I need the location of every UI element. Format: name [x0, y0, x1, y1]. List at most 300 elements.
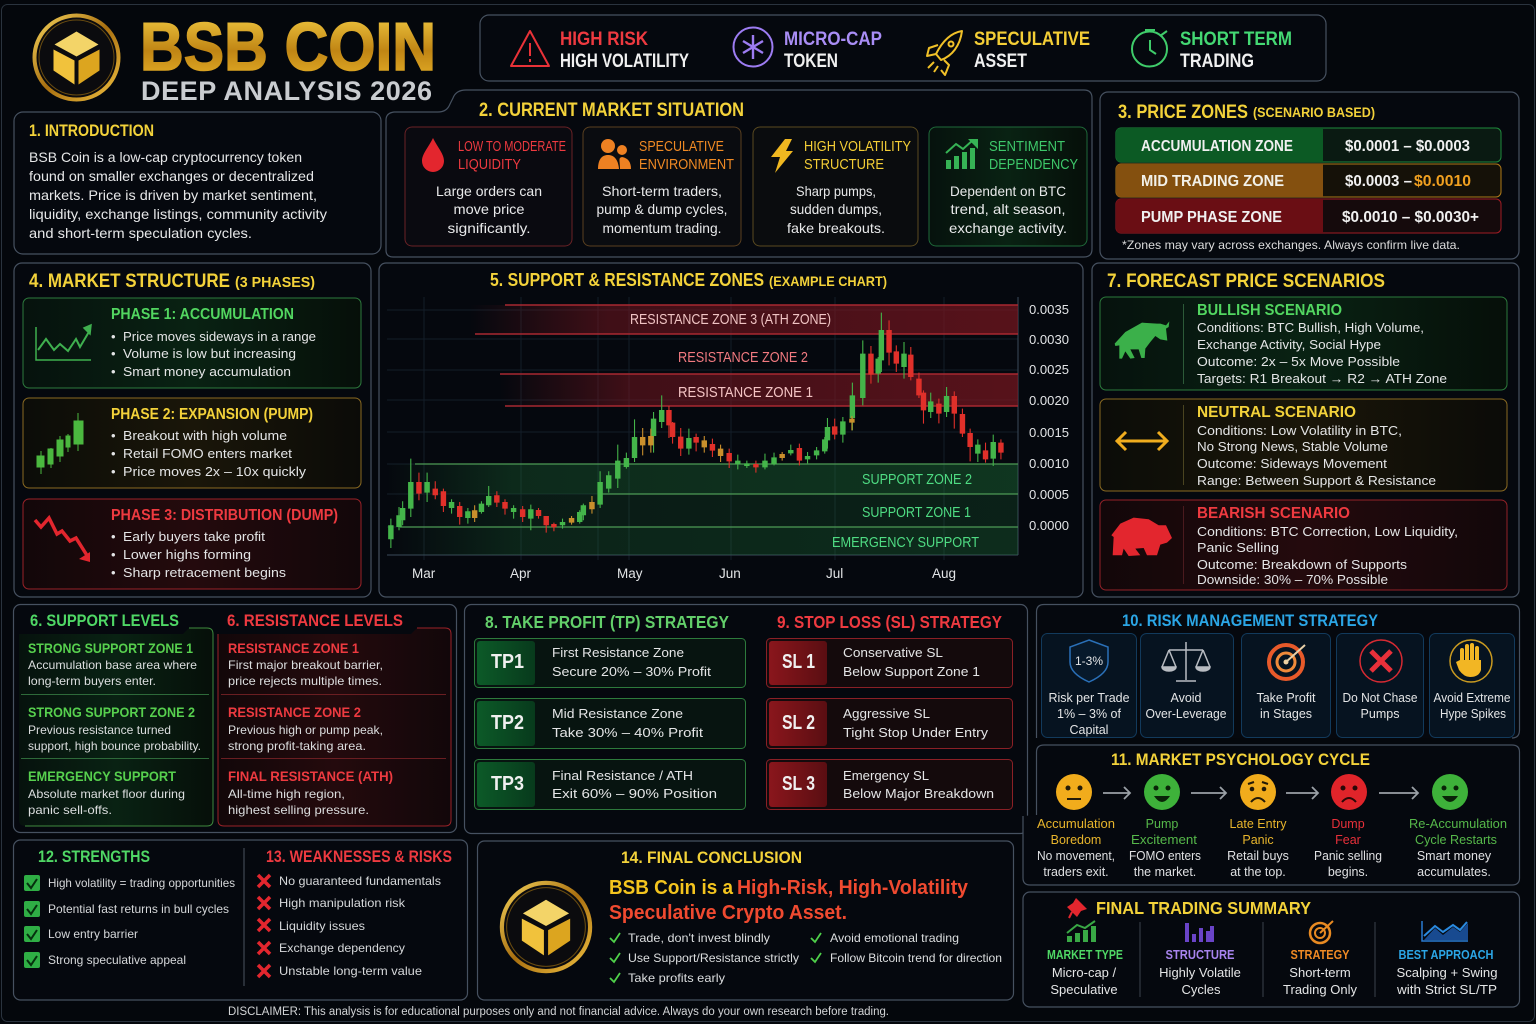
stage: re-accumulation: [1409, 817, 1507, 879]
card: neutral: Conditions: Low Volatility in BTC,: [1197, 423, 1402, 438]
card: SL1: [766, 638, 1012, 688]
column: best approach: BEST APPROACH: [1398, 947, 1494, 962]
stage: dump: Fear: [1335, 833, 1361, 847]
chart grid: [387, 297, 1018, 560]
badge: high risk: [560, 29, 689, 72]
card: avoid over-leverage: Avoid: [1170, 691, 1202, 705]
column: strategy: [1283, 921, 1357, 997]
heading: take profit: 8. TAKE PROFIT (TP) STRATEGY: [485, 612, 729, 632]
panel: 4 market structure: [14, 263, 371, 597]
list: strengths: Potential fast returns in bull cycles: [48, 902, 229, 916]
heading: resistance levels: 6. RESISTANCE LEVELS: [227, 611, 403, 630]
stage: late entry: at the top.: [1230, 865, 1286, 879]
text block: markets. Price is driven by market sentiment,: [29, 187, 317, 203]
stage: accumulation: No movement,: [1037, 849, 1115, 863]
panel: 8 and 9 take profit and stop loss: [464, 604, 1028, 834]
checklist: Use Support/Resistance strictly: [628, 951, 799, 965]
stage: dump: begins.: [1328, 865, 1368, 879]
card: structure: STRUCTURE: [804, 156, 884, 173]
card: phase 3: •: [111, 565, 116, 580]
card: phase 1: [23, 298, 361, 388]
note: *Zones may vary across exchanges. Always confirm live data.: [1122, 238, 1460, 252]
card: sentiment: trend, alt season,: [950, 201, 1066, 217]
row: accumulation zone: [1116, 128, 1501, 162]
card: resistance levels: [218, 628, 451, 826]
card: structure: Sharp pumps,: [796, 183, 876, 199]
card: SL3: [766, 760, 1012, 810]
card: phase 3: Early buyers take profit: [123, 529, 265, 544]
arrow: [1191, 787, 1226, 799]
list: strengths: Strong speculative appeal: [48, 953, 186, 967]
panel: 12 and 13 strengths and weaknesses: [14, 840, 468, 1000]
card: resistance levels: RESISTANCE ZONE 1: [228, 640, 359, 656]
card: bearish: Outcome: Breakdown of Supports: [1197, 557, 1408, 572]
card: SL3: SL 3: [782, 773, 815, 795]
heading: 5. SUPPORT & RESISTANCE ZONES: [490, 270, 764, 290]
card: TP1: First Resistance Zone: [552, 645, 684, 660]
x axis labels: Mar: [412, 566, 436, 581]
stage: re-accumulation: Re-Accumulation: [1409, 817, 1507, 831]
icon: worried face: [1240, 774, 1276, 810]
zone labels: [630, 311, 979, 551]
headline: BSB Coin is a: [609, 877, 734, 899]
checklist: [610, 931, 1002, 985]
panel: 5 support and resistance chart: [379, 263, 1083, 597]
heading: (3 PHASES): [235, 274, 315, 291]
card: avoid hype spikes: [1430, 634, 1514, 738]
card: support levels: EMERGENCY SUPPORT: [28, 768, 176, 784]
card: resistance levels: strong profit-taking area.: [228, 739, 366, 753]
arrow: [1286, 787, 1318, 799]
row: accumulation zone: ACCUMULATION ZONE: [1141, 138, 1293, 155]
heading: (EXAMPLE CHART): [769, 273, 887, 289]
card: phase 1: •: [111, 364, 116, 379]
x axis labels: Aug: [932, 566, 956, 581]
list: weaknesses: [258, 874, 441, 978]
card: avoid over-leverage: Over-Leverage: [1146, 707, 1227, 721]
column: market type: MARKET TYPE: [1047, 947, 1123, 962]
column: best approach: with Strict SL/TP: [1396, 982, 1497, 997]
card: phase 2: Price moves 2x – 10x quickly: [123, 464, 307, 479]
stage: dump: [1314, 817, 1382, 879]
icon: warning triangle: [511, 31, 549, 66]
heading: 10. RISK MANAGEMENT STRATEGY: [1122, 611, 1379, 630]
icon: bear: [1111, 518, 1172, 556]
x axis labels: Jun: [719, 566, 741, 581]
panel: 6 support and resistance levels: [14, 604, 456, 832]
card: phase 1: PHASE 1: ACCUMULATION: [111, 306, 294, 323]
disclaimer: DISCLAIMER: This analysis is for educational purposes only and not financial advice. Always do your own research before trading.: [228, 1006, 889, 1018]
stage: late entry: Late Entry: [1230, 817, 1287, 831]
icon: rocket: [927, 31, 962, 75]
row: pump phase zone: $0.0010 – $0.0030+: [1342, 209, 1479, 226]
checklist: Take profits early: [628, 971, 725, 985]
icon: drop: [422, 138, 444, 172]
card: phase 3: Sharp retracement begins: [123, 565, 287, 580]
icon: stop hand: [1450, 640, 1492, 682]
icon: pin: [1067, 898, 1087, 918]
panel: 14 final conclusion: [478, 841, 1014, 1000]
stage: accumulation: Accumulation: [1037, 817, 1115, 831]
card: phase 3: PHASE 3: DISTRIBUTION (DUMP): [111, 507, 338, 524]
card: risk per trade: Risk per Trade: [1048, 691, 1130, 705]
heading: 14. FINAL CONCLUSION: [621, 848, 802, 867]
stage: re-accumulation: accumulates.: [1417, 865, 1491, 879]
card: sentiment: DEPENDENCY: [989, 156, 1078, 173]
card: risk per trade: [1042, 634, 1136, 738]
card: resistance levels: First major breakout barrier,: [228, 658, 383, 672]
card: phase 2: PHASE 2: EXPANSION (PUMP): [111, 406, 313, 423]
title: BSB COIN: [140, 9, 436, 85]
card: environment: pump & dump cycles,: [596, 201, 728, 217]
heading: FINAL TRADING SUMMARY: [1096, 898, 1311, 918]
card: phase 2: •: [111, 464, 116, 479]
heading: 3. PRICE ZONES: [1118, 102, 1248, 123]
list: strengths: Low entry barrier: [48, 927, 138, 941]
candlesticks: [388, 313, 1004, 548]
card: bullish: Exchange Activity, Social Hype: [1197, 337, 1381, 352]
badge: micro-cap: TOKEN: [784, 51, 838, 72]
arrow: [1379, 787, 1418, 799]
icon: sad face: [1331, 774, 1367, 810]
card: phase 2: •: [111, 446, 116, 461]
card: support levels: panic sell-offs.: [28, 803, 112, 817]
card: neutral: [1100, 399, 1507, 491]
panel: 1 introduction: [14, 112, 381, 254]
panel: 11 market psychology cycle: [1023, 745, 1520, 885]
card: phase 1: •: [111, 329, 116, 344]
badge: speculative: [974, 29, 1090, 72]
panel: final trading summary: [1023, 892, 1520, 1007]
column: market type: Speculative: [1050, 982, 1118, 997]
badge: speculative: ASSET: [974, 51, 1027, 72]
card: bullish: [1100, 297, 1507, 390]
text block: liquidity, exchange listings, community activity: [29, 206, 327, 222]
card: bullish: Conditions: BTC Bullish, High Volume,: [1197, 320, 1424, 335]
card: SL1: SL 1: [782, 651, 815, 673]
card: support levels: long-term buyers enter.: [28, 674, 156, 688]
card: SL3: Below Major Breakdown: [843, 786, 994, 801]
card: neutral: No Strong News, Stable Volume: [1197, 439, 1388, 454]
card: phase 3: •: [111, 529, 116, 544]
list: weaknesses: High manipulation risk: [279, 896, 406, 910]
icon: blue chart: [1422, 921, 1468, 941]
x axis labels: May: [617, 566, 643, 581]
row: mid trading zone: [1116, 164, 1501, 197]
zone labels: SUPPORT ZONE 1: [862, 504, 971, 521]
card: avoid over-leverage: [1140, 634, 1234, 738]
card: environment: momentum trading.: [602, 220, 722, 236]
heading: 7. FORECAST PRICE SCENARIOS: [1107, 271, 1385, 292]
card: neutral: Range: Between Support & Resistance: [1197, 473, 1436, 488]
card: do not chase pumps: Pumps: [1361, 707, 1399, 721]
card: phase 1: Volume is low but increasing: [123, 346, 296, 361]
card: TP3: [474, 760, 746, 810]
y axis labels: 0.0005: [1029, 487, 1069, 502]
stage: late entry: Retail buys: [1227, 849, 1289, 863]
card: bearish: Downside: 30% – 70% Possible: [1197, 572, 1388, 587]
card: TP2: [474, 698, 746, 748]
headline: High-Risk, High-Volatility: [737, 877, 969, 899]
card: do not chase pumps: [1336, 634, 1424, 738]
card: phase 1: Price moves sideways in a range: [123, 329, 316, 344]
card: risk per trade: Capital: [1070, 723, 1108, 737]
list: weaknesses: No guaranteed fundamentals: [279, 874, 441, 888]
y axis labels: 0.0025: [1029, 362, 1069, 377]
panel: 7 forecast price scenarios: [1092, 263, 1519, 597]
column: strategy: Short-term: [1289, 965, 1351, 980]
card: TP3: Exit 60% – 90% Position: [552, 786, 717, 801]
card: bullish: Targets: R1 Breakout → R2 → ATH Zone: [1197, 371, 1447, 386]
card: sentiment: exchange activity.: [949, 220, 1067, 236]
card: structure: HIGH VOLATILITY: [804, 138, 911, 155]
subtitle: DEEP ANALYSIS 2026: [141, 76, 432, 106]
arrow: [1103, 787, 1130, 799]
heading: support levels: 6. SUPPORT LEVELS: [30, 611, 179, 630]
stage: pump: the market.: [1134, 865, 1196, 879]
card: sentiment: SENTIMENT: [989, 138, 1065, 155]
x axis labels: [412, 566, 956, 581]
column: strategy: STRATEGY: [1290, 947, 1350, 962]
card: TP2: TP2: [491, 712, 524, 734]
y axis labels: 0.0035: [1029, 302, 1069, 317]
card: sentiment: [929, 127, 1087, 246]
list: strengths: High volatility = trading opportunities: [48, 876, 235, 890]
badge: high risk: HIGH RISK: [560, 29, 648, 50]
card: bullish: Outcome: 2x – 5x Move Possible: [1197, 354, 1400, 369]
badge: speculative: SPECULATIVE: [974, 29, 1090, 50]
zone labels: EMERGENCY SUPPORT: [832, 534, 979, 551]
icon: happy face: [1432, 774, 1468, 810]
card: TP1: TP1: [491, 651, 524, 673]
stage: pump: FOMO enters: [1129, 849, 1201, 863]
stage: late entry: [1227, 817, 1289, 879]
card: structure: sudden dumps,: [790, 201, 882, 217]
icon: bull: [1115, 321, 1169, 359]
y axis labels: [1029, 302, 1069, 533]
card: resistance levels: highest selling pressure.: [228, 803, 369, 817]
heading: weaknesses and risks: 13. WEAKNESSES & RISKS: [266, 848, 452, 866]
text block: [29, 149, 327, 241]
icon: clock: [1132, 30, 1167, 66]
heading: stop loss: 9. STOP LOSS (SL) STRATEGY: [777, 612, 1002, 632]
column: market type: Micro-cap /: [1052, 965, 1117, 980]
column: strategy: Trading Only: [1283, 982, 1357, 997]
card: resistance levels: FINAL RESISTANCE (ATH): [228, 768, 393, 784]
card: phase 3: Lower highs forming: [123, 547, 251, 562]
heading: strengths: 12. STRENGTHS: [38, 848, 150, 866]
stage: dump: Dump: [1331, 817, 1365, 831]
badge: micro-cap: [784, 29, 882, 72]
stage: re-accumulation: Cycle Restarts: [1415, 833, 1497, 847]
card: take profit in stages: Take Profit: [1256, 691, 1316, 705]
headline: [609, 877, 969, 924]
card: TP3: Final Resistance / ATH: [552, 768, 693, 783]
column: structure: Highly Volatile: [1159, 965, 1241, 980]
card: phase 2: Breakout with high volume: [123, 428, 287, 443]
list: weaknesses: Liquidity issues: [279, 919, 365, 933]
icon: growth bars: [1067, 921, 1096, 942]
card: phase 1: Smart money accumulation: [123, 364, 291, 379]
card: structure: [753, 127, 918, 246]
column: best approach: [1396, 921, 1498, 997]
zone labels: RESISTANCE ZONE 1: [678, 384, 813, 401]
row: mid trading zone: $0.0003 –: [1345, 173, 1412, 190]
x axis labels: Apr: [510, 566, 532, 581]
card: support levels: Absolute market floor during: [28, 787, 185, 801]
checklist: Avoid emotional trading: [830, 931, 959, 945]
logo: BSB coin: [34, 16, 118, 100]
icon: falling chart: [35, 518, 90, 562]
icon: growth bars: [946, 139, 978, 169]
stage: pump: [1129, 817, 1201, 879]
card: bullish: BULLISH SCENARIO: [1197, 302, 1342, 319]
column: best approach: Scalping + Swing: [1396, 965, 1498, 980]
card: SL1: Conservative SL: [843, 645, 943, 660]
heading: [1118, 102, 1375, 123]
stage: accumulation: traders exit.: [1043, 865, 1109, 879]
icon: happy face: [1144, 774, 1180, 810]
heading: (SCENARIO BASED): [1253, 104, 1375, 120]
card: support levels: STRONG SUPPORT ZONE 2: [28, 704, 195, 720]
column: structure: [1159, 923, 1241, 997]
card: bearish: Panic Selling: [1197, 540, 1279, 555]
card: phase 1: •: [111, 346, 116, 361]
row: accumulation zone: $0.0001 – $0.0003: [1345, 138, 1470, 155]
card: support levels: Accumulation base area where: [28, 658, 197, 672]
row: mid trading zone: MID TRADING ZONE: [1141, 173, 1284, 190]
y axis labels: 0.0020: [1029, 393, 1069, 408]
badge: short term: SHORT TERM: [1180, 29, 1292, 50]
stage: re-accumulation: Smart money: [1417, 849, 1492, 863]
card: phase 3: [23, 499, 361, 589]
icon: micro-cap: [734, 28, 772, 66]
icon: bolt: [771, 139, 793, 173]
text block: found on smaller exchanges or decentralized: [29, 168, 314, 184]
panel: top badges: [480, 15, 1326, 81]
support zones: [387, 464, 1018, 555]
card: resistance levels: RESISTANCE ZONE 2: [228, 704, 361, 720]
card: TP3: TP3: [491, 773, 524, 795]
icon: people: [598, 139, 631, 169]
card: bearish: [1100, 500, 1507, 590]
card: take profit in stages: in Stages: [1260, 707, 1312, 721]
y axis labels: 0.0000: [1029, 518, 1069, 533]
card: resistance levels: price rejects multiple times.: [228, 674, 382, 688]
panel: 3 price zones: [1100, 92, 1519, 259]
icon: coin: [502, 883, 590, 971]
card: SL2: Aggressive SL: [843, 706, 930, 721]
resistance zones: [470, 305, 1018, 406]
panel: 2 current market situation: [386, 90, 1092, 257]
card: resistance levels: Previous high or pump peak,: [228, 723, 383, 737]
icon: scales: [1162, 642, 1210, 681]
card: environment: SPECULATIVE: [639, 138, 724, 155]
card: liquidity: [405, 127, 572, 246]
card: support levels: support, high bounce probability.: [28, 739, 201, 753]
column: structure: STRUCTURE: [1166, 947, 1235, 962]
list: weaknesses: Exchange dependency: [279, 941, 405, 955]
checklist: Follow Bitcoin trend for direction: [830, 951, 1002, 965]
card: phase 2: [23, 398, 361, 488]
card: bearish: Conditions: BTC Correction, Low Liquidity,: [1197, 524, 1458, 539]
zone labels: RESISTANCE ZONE 2: [678, 349, 808, 366]
heading: 11. MARKET PSYCHOLOGY CYCLE: [1111, 750, 1370, 769]
card: environment: [583, 127, 741, 246]
stage: pump: Excitement: [1131, 833, 1198, 847]
y axis labels: 0.0030: [1029, 332, 1069, 347]
card: sentiment: Dependent on BTC: [950, 183, 1066, 199]
card: SL2: [766, 698, 1012, 748]
card: liquidity: significantly.: [448, 220, 530, 236]
card: SL1: Below Support Zone 1: [843, 664, 980, 679]
x axis labels: Jul: [826, 566, 843, 581]
panel: 10 risk management: [1036, 604, 1520, 738]
card: avoid hype spikes: Hype Spikes: [1440, 707, 1506, 721]
card: TP1: [474, 638, 746, 688]
icon: rising candles: [37, 413, 83, 474]
card: SL3: Emergency SL: [843, 768, 929, 783]
card: support levels: Previous resistance turned: [28, 723, 171, 737]
icon: shield: 1-3%: [1075, 654, 1103, 668]
heading: 2. CURRENT MARKET SITUATION: [479, 100, 744, 121]
stage: accumulation: Boredom: [1051, 833, 1101, 847]
card: resistance levels: All-time high region,: [228, 787, 345, 801]
card: neutral: NEUTRAL SCENARIO: [1197, 404, 1356, 421]
card: TP2: Mid Resistance Zone: [552, 706, 683, 721]
list: weaknesses: Unstable long-term value: [279, 964, 422, 978]
badge: short term: TRADING: [1180, 51, 1254, 72]
card: phase 3: •: [111, 547, 116, 562]
card: SL2: Tight Stop Under Entry: [843, 725, 989, 740]
icon: sideways arrow: [1117, 432, 1167, 450]
checklist: Trade, don't invest blindly: [628, 931, 770, 945]
column: structure: Cycles: [1181, 982, 1221, 997]
column: market type: [1047, 921, 1123, 997]
card: risk per trade: 1% – 3% of: [1057, 707, 1122, 721]
badge: short term: [1180, 29, 1292, 72]
card: phase 2: Retail FOMO enters market: [123, 446, 292, 461]
stage: late entry: Panic: [1242, 833, 1274, 847]
card: phase 2: •: [111, 428, 116, 443]
list: strengths: [24, 875, 235, 968]
card: take profit in stages: [1242, 634, 1330, 738]
badge: high risk: HIGH VOLATILITY: [560, 51, 689, 72]
stage: pump: Pump: [1146, 817, 1178, 831]
zone labels: SUPPORT ZONE 2: [862, 471, 972, 488]
y axis labels: 0.0015: [1029, 425, 1069, 440]
card: environment: ENVIRONMENT: [639, 156, 734, 173]
card: do not chase pumps: Do Not Chase: [1342, 691, 1418, 705]
stage: accumulation: [1037, 817, 1115, 879]
text block: BSB Coin is a low-cap cryptocurrency token: [29, 149, 302, 165]
icon: target: [1310, 921, 1333, 943]
heading: 4. MARKET STRUCTURE: [29, 271, 230, 292]
card: structure: fake breakouts.: [787, 220, 885, 236]
card: bearish: BEARISH SCENARIO: [1197, 505, 1350, 522]
card: liquidity: LOW TO MODERATE: [458, 138, 566, 155]
zone labels: RESISTANCE ZONE 3 (ATH ZONE): [630, 311, 831, 328]
icon: target: [1269, 645, 1305, 679]
card: TP2: Take 30% – 40% Profit: [552, 725, 703, 740]
badge: micro-cap: MICRO-CAP: [784, 29, 882, 50]
text block: and short-term speculation cycles.: [29, 225, 252, 241]
stage: dump: Panic selling: [1314, 849, 1382, 863]
card: TP1: Secure 20% – 30% Profit: [552, 664, 711, 679]
heading: 1. INTRODUCTION: [29, 121, 154, 140]
row: mid trading zone: $0.0010: [1414, 173, 1471, 190]
card: support levels: [19, 628, 213, 826]
